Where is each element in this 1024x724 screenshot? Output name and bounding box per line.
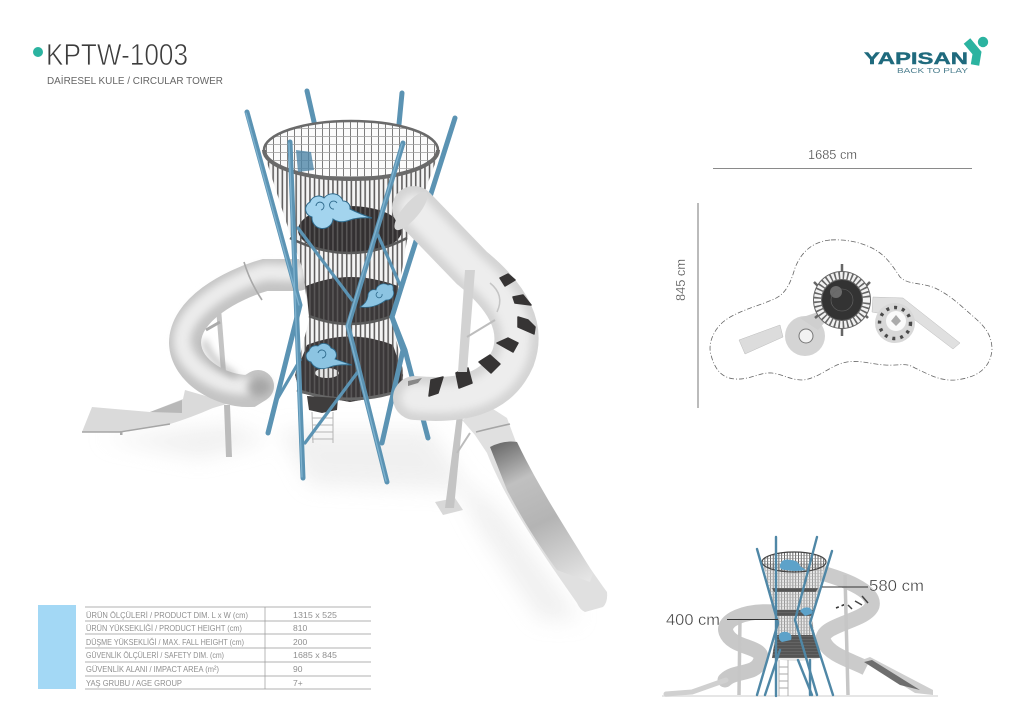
logo wordmark: YAPISAN	[864, 49, 968, 68]
right slide lower chute	[462, 407, 607, 612]
logo Y mark	[967, 41, 977, 65]
row: safety dimensions: 1685 x 845	[293, 650, 337, 660]
plan right slide	[872, 297, 960, 349]
vertical bars	[263, 150, 440, 402]
depth dimension label: 845 cm	[674, 259, 688, 301]
left slide exit chute	[82, 390, 230, 432]
row: impact area: GÜVENLİK ALANI / IMPACT AREA (m²)	[86, 664, 219, 674]
tower basket	[263, 121, 440, 443]
top net	[264, 121, 438, 179]
height label 580 cm: 580 cm	[869, 578, 924, 595]
row: age group	[86, 678, 303, 688]
ladder top hood	[307, 396, 338, 413]
back blue poles	[307, 91, 455, 282]
elevation support poles	[739, 575, 848, 695]
front elevation view	[662, 537, 938, 696]
left slide rear support pole	[216, 308, 226, 372]
tower dark deck lower	[295, 336, 403, 402]
slide windows	[429, 274, 535, 396]
row: product height: ÜRÜN YÜKSEKLİĞİ / PRODUCT HEIGHT (cm)	[86, 623, 242, 633]
row: max fall height: 200	[293, 637, 307, 647]
main product render: circular tower with two slides	[82, 91, 607, 620]
width dimension line	[713, 168, 972, 170]
elevation right slide	[818, 572, 933, 695]
elevation tower	[762, 552, 826, 696]
slide tube joint	[490, 283, 500, 312]
elevation ladder	[779, 660, 788, 696]
row: product dimensions: ÜRÜN ÖLÇÜLERİ / PRODUCT DIM. L x W (cm)	[86, 610, 248, 620]
slide tube top opening	[389, 187, 433, 235]
height leader 580 cm	[822, 586, 868, 588]
left slide tube end shading	[247, 378, 271, 396]
row: safety dimensions	[86, 650, 337, 660]
left slide inner shading	[204, 340, 236, 376]
elevation ground line	[662, 695, 938, 697]
logo tagline: BACK TO PLAY	[897, 66, 968, 75]
spec table	[85, 607, 371, 689]
height label 400 cm: 400 cm	[666, 612, 720, 629]
product code: KPTW-1003	[46, 37, 188, 72]
spec table color swatch	[38, 605, 76, 689]
row: max fall height: DÜŞME YÜKSEKLİĞİ / MAX. FALL HEIGHT (cm)	[86, 637, 244, 647]
right slide lower support pole and base plate	[435, 415, 470, 515]
pole highlights	[246, 113, 402, 481]
tower dark deck upper	[298, 206, 402, 254]
left slide front support pole	[224, 405, 232, 457]
cloud panel: middle	[360, 284, 394, 307]
height leader 400 cm	[727, 618, 778, 620]
row: impact area: 90	[293, 664, 303, 674]
tower white background	[263, 150, 440, 402]
middle rings	[290, 238, 407, 253]
right slide upper support pole	[458, 270, 495, 372]
lower deck opening	[315, 368, 339, 378]
depth dimension line	[697, 203, 699, 408]
plan left slide	[739, 312, 825, 356]
left slide tube joint	[244, 262, 262, 300]
left slide tube	[182, 272, 298, 391]
row: product height: 810	[293, 623, 307, 633]
row: age group: 7+	[293, 678, 303, 688]
front blue frame poles	[247, 112, 428, 482]
cloud panel: upper	[306, 194, 372, 229]
elevation blue poles	[757, 537, 833, 696]
ground shadows	[100, 425, 580, 620]
product subtitle: DAİRESEL KULE / CIRCULAR TOWER	[47, 74, 223, 87]
row: impact area	[86, 664, 303, 674]
row: product dimensions: 1315 x 525	[293, 610, 337, 620]
row: safety dimensions: GÜVENLİK ÖLÇÜLERİ / SAFETY DIM. (cm)	[86, 650, 224, 660]
title bullet	[33, 47, 43, 57]
cloud panel: lower	[306, 344, 352, 369]
top rim	[264, 121, 438, 150]
title block	[33, 37, 223, 87]
elevation left slide	[666, 612, 775, 694]
left spiral slide	[82, 262, 298, 435]
right slide tube	[389, 187, 535, 399]
tower dark deck middle	[306, 277, 398, 324]
cloud panel: shaded back	[296, 150, 314, 172]
logo: Yapisan	[864, 37, 988, 75]
plan view with safety dimensions	[674, 148, 992, 408]
plan tower	[813, 264, 871, 336]
elevation clouds	[780, 560, 806, 571]
ladder	[312, 412, 333, 443]
width dimension label: 1685 cm	[808, 148, 857, 162]
safety zone dashed outline	[710, 240, 992, 380]
row: age group: YAŞ GRUBU / AGE GROUP	[86, 678, 182, 688]
